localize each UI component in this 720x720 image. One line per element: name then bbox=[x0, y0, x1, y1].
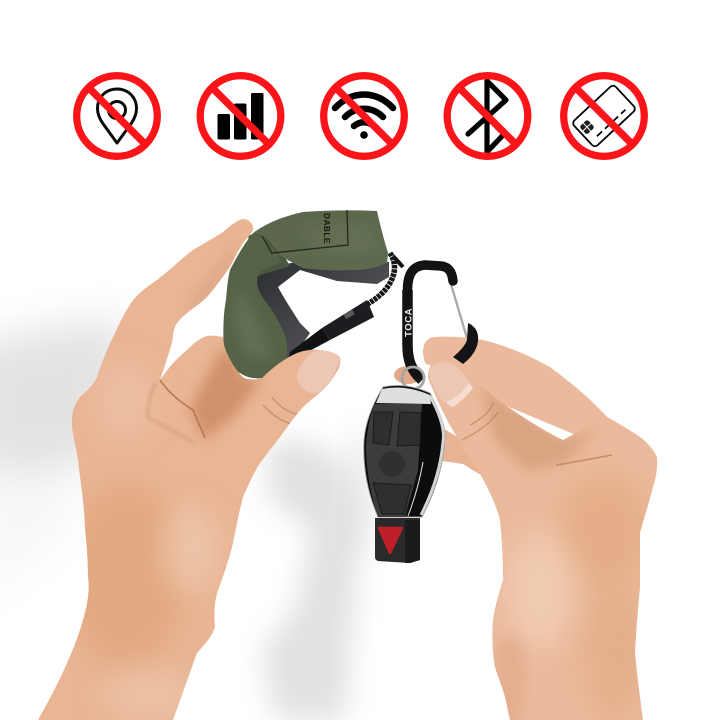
pouch dark lining bbox=[257, 262, 389, 370]
right hand skin tones bbox=[462, 385, 650, 720]
left hand bbox=[38, 219, 340, 720]
index finger bbox=[423, 337, 607, 445]
pouch fold bbox=[248, 228, 290, 276]
left hand skin tones bbox=[78, 259, 298, 716]
pouch bbox=[223, 210, 395, 378]
pouch label: DABLE bbox=[322, 213, 332, 244]
zipper bbox=[368, 253, 395, 304]
icon: no location bbox=[77, 76, 157, 156]
icon: no wifi bbox=[324, 76, 404, 156]
button: panic bbox=[373, 412, 393, 445]
right thumb nail bbox=[428, 362, 473, 407]
wall shadows bbox=[0, 320, 372, 720]
fob end cap bbox=[375, 518, 420, 563]
fob chrome right edge bbox=[421, 396, 443, 515]
right hand bbox=[428, 360, 657, 720]
icons row bbox=[77, 76, 644, 156]
middle finger behind fob bbox=[438, 425, 484, 477]
fob chrome top bbox=[376, 387, 431, 404]
pouch left fabric lobe bbox=[223, 233, 287, 378]
skin behind ring bbox=[394, 366, 422, 384]
carabiner bbox=[393, 256, 478, 380]
pouch fabric highlights bbox=[234, 285, 272, 360]
right hand index finger and middle finger bbox=[394, 337, 607, 477]
fob glossy body bbox=[364, 385, 445, 517]
fob keypad bbox=[366, 404, 422, 517]
button: center bbox=[379, 451, 405, 477]
icon: no bluetooth bbox=[447, 76, 528, 156]
red panic button bbox=[379, 528, 402, 553]
zipper pull bbox=[322, 300, 374, 340]
icon: no credit card bbox=[564, 76, 644, 156]
car key fob bbox=[364, 367, 445, 563]
zipper tape end bbox=[288, 328, 330, 362]
carabiner brand text: TOCA bbox=[404, 308, 414, 337]
pouch upper fabric bbox=[253, 210, 388, 270]
icon: no cellular signal bbox=[200, 76, 281, 156]
button: unlock bbox=[397, 412, 421, 446]
split ring bbox=[402, 367, 424, 389]
left thumb nail bbox=[297, 350, 340, 394]
button: lock bbox=[373, 483, 411, 514]
